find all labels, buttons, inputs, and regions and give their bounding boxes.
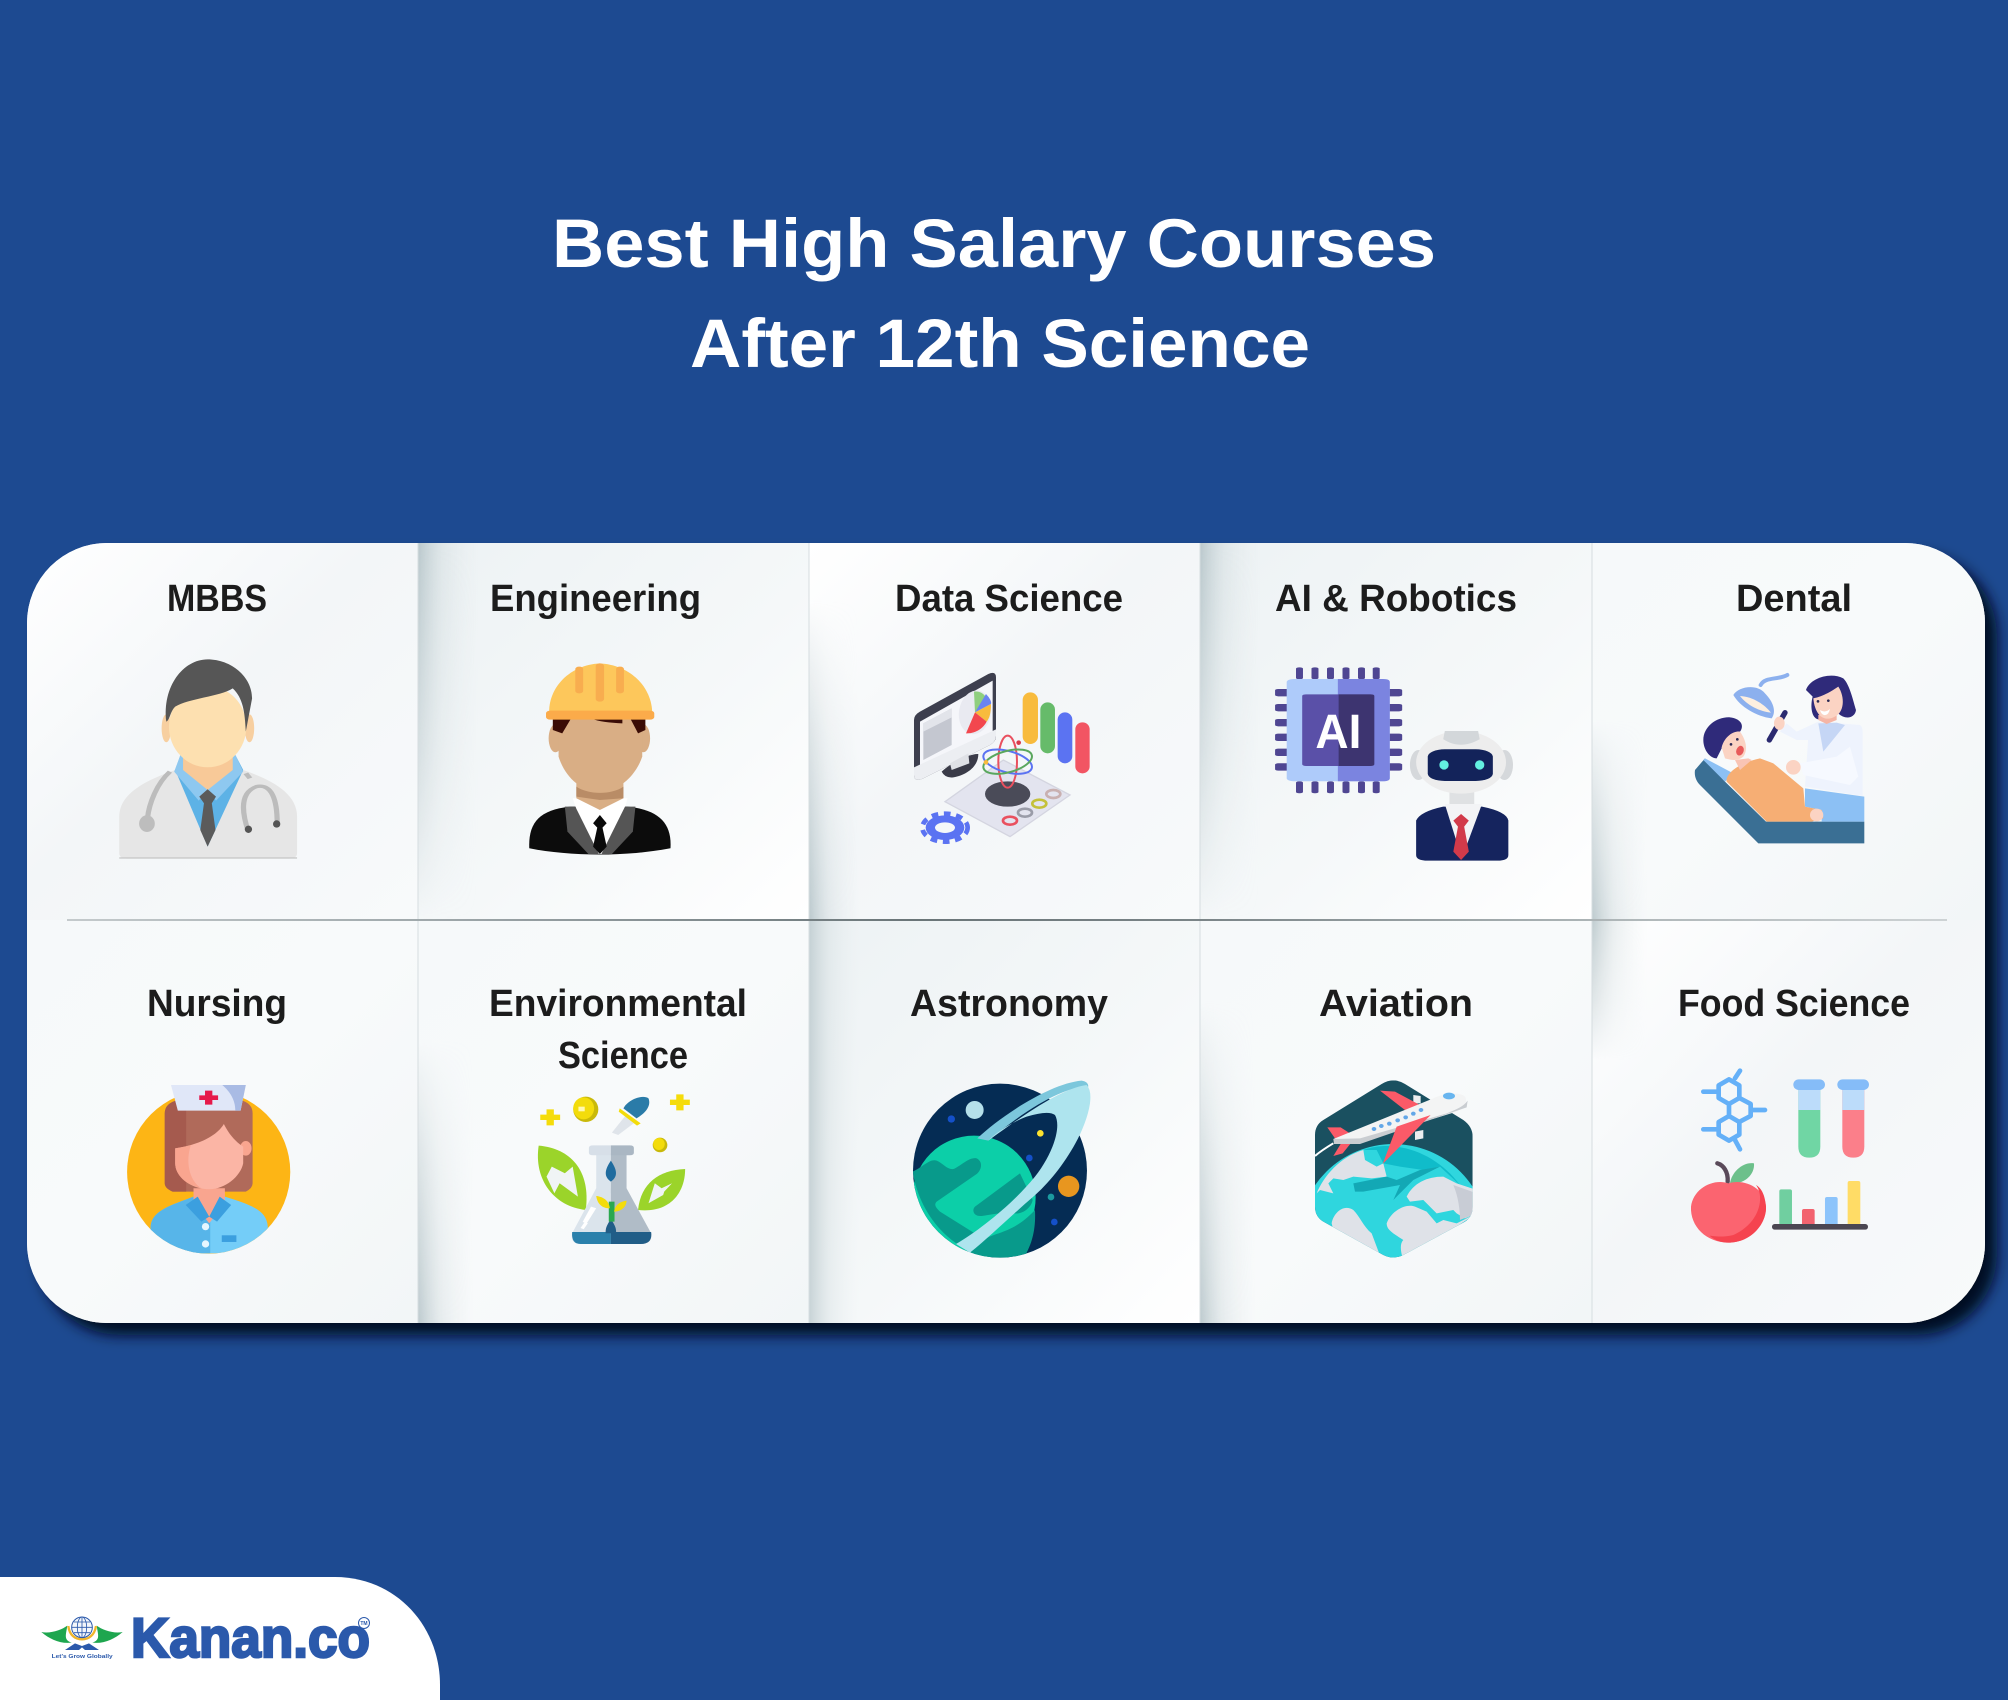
logo emblem [41,1617,123,1660]
panel: course card grid [27,543,1985,1334]
title [552,205,1436,382]
icon: nurse [127,1085,290,1254]
icon: AI chip and robot [1275,667,1513,861]
icon: astronomy planet [912,1081,1090,1259]
label: Data Science: Data Science [895,578,1123,620]
label: Dental: Dental [1736,578,1852,620]
label: Environmental Science [489,983,747,1077]
row divider [67,919,1947,921]
icon: aviation globe and plane [1315,1080,1473,1258]
label: Aviation: Aviation [1319,983,1473,1025]
icon: dentist and patient [1695,675,1864,843]
card base with shadow [27,543,1985,1323]
logo emblem: Let's Grow Globally [52,1654,114,1660]
title: After 12th Science [690,305,1310,382]
label: Engineering: Engineering [490,578,701,620]
label: Environmental Science: Science [558,1035,688,1077]
footer logo panel [0,1577,440,1700]
icon: doctor [119,659,297,859]
cell shading [27,543,1985,1323]
label: AI & Robotics: AI & Robotics [1275,578,1517,620]
icon: food science [1691,1071,1869,1243]
icon: AI chip and robot: AI [1315,706,1361,759]
icon: engineer [529,663,671,855]
trademark mark [358,1618,370,1628]
label: Nursing: Nursing [147,983,287,1025]
icon: environmental flask [538,1094,690,1244]
footer white tab [0,1577,440,1700]
label: Food Science: Food Science [1678,983,1910,1025]
label: Environmental Science: Environmental [489,983,747,1025]
title: Best High Salary Courses [552,205,1436,282]
label: MBBS: MBBS [167,578,267,620]
logo wordmark: Kanan.co [131,1606,370,1669]
icon: data science [914,673,1090,842]
trademark mark: TM [360,1621,368,1627]
label: Astronomy: Astronomy [910,983,1108,1025]
